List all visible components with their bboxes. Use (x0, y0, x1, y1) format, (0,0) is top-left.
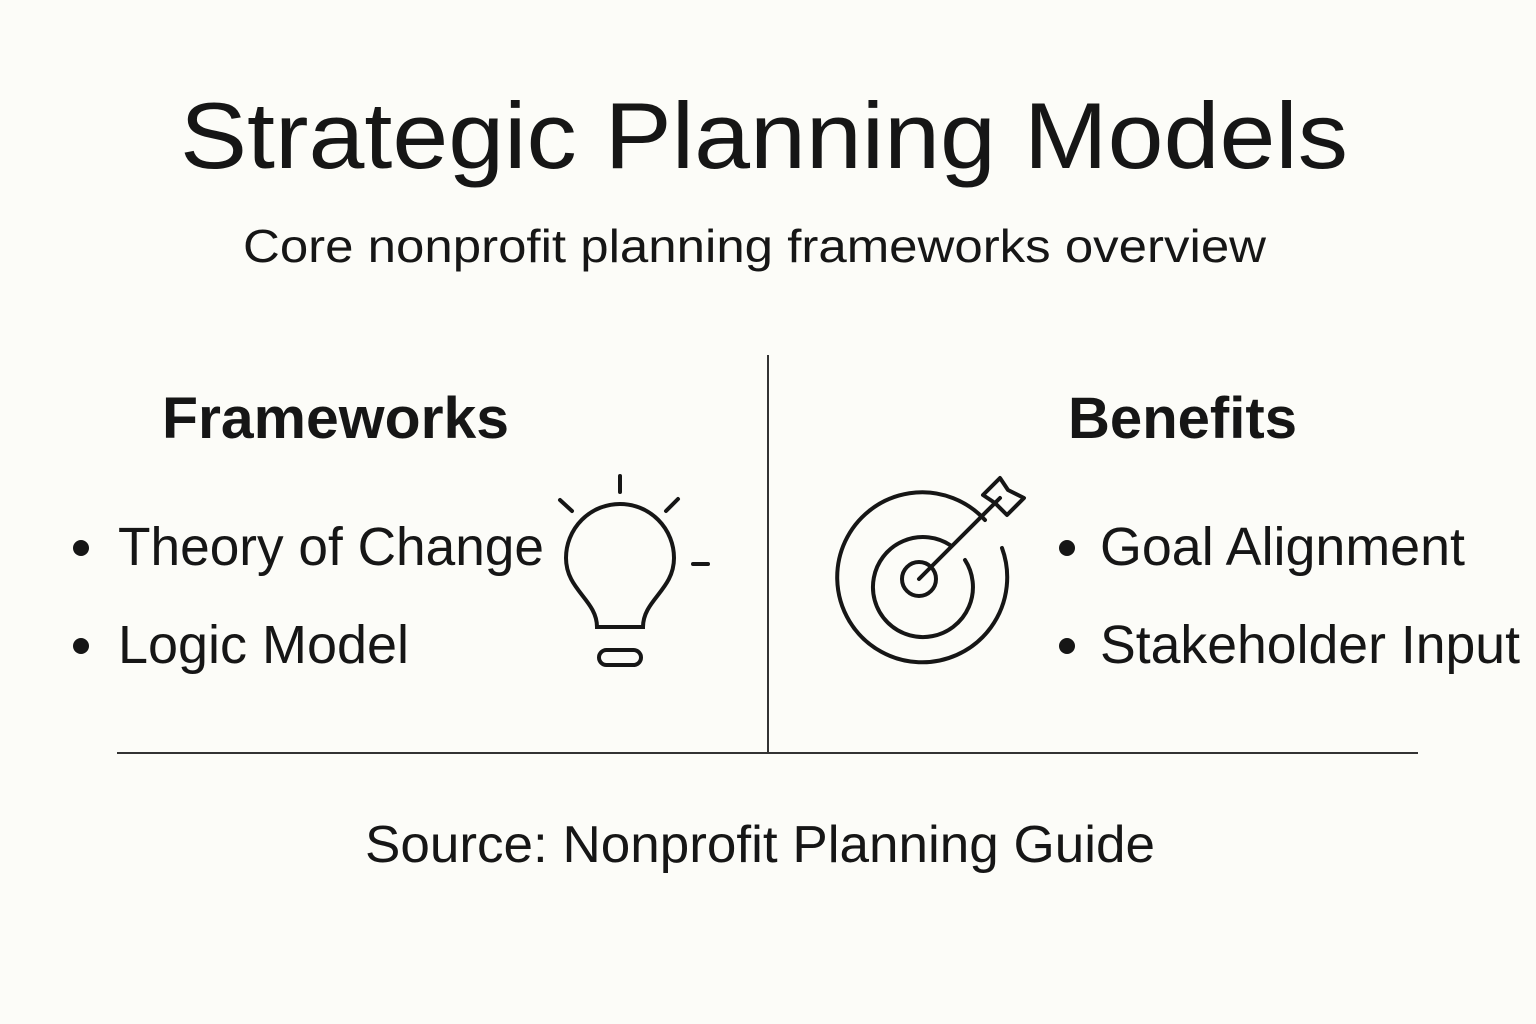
subtitle: Core nonprofit planning frameworks overview (243, 220, 1267, 272)
source: Source: Nonprofit Planning Guide (365, 816, 1155, 874)
title: Strategic Planning Models (180, 83, 1348, 188)
icon: target with arrow (837, 478, 1024, 662)
bullet: logic model: Logic Model (118, 615, 409, 675)
panel: frameworks (73, 386, 708, 675)
bullet: theory of change: Theory of Change (118, 517, 544, 577)
icon: lightbulb (560, 476, 708, 665)
panel: benefits (837, 386, 1520, 675)
bullet: goal alignment: Goal Alignment (1100, 517, 1465, 577)
bullet: stakeholder input: Stakeholder Input (1100, 615, 1520, 675)
heading: frameworks: Frameworks (162, 386, 509, 451)
heading: benefits: Benefits (1068, 386, 1297, 451)
